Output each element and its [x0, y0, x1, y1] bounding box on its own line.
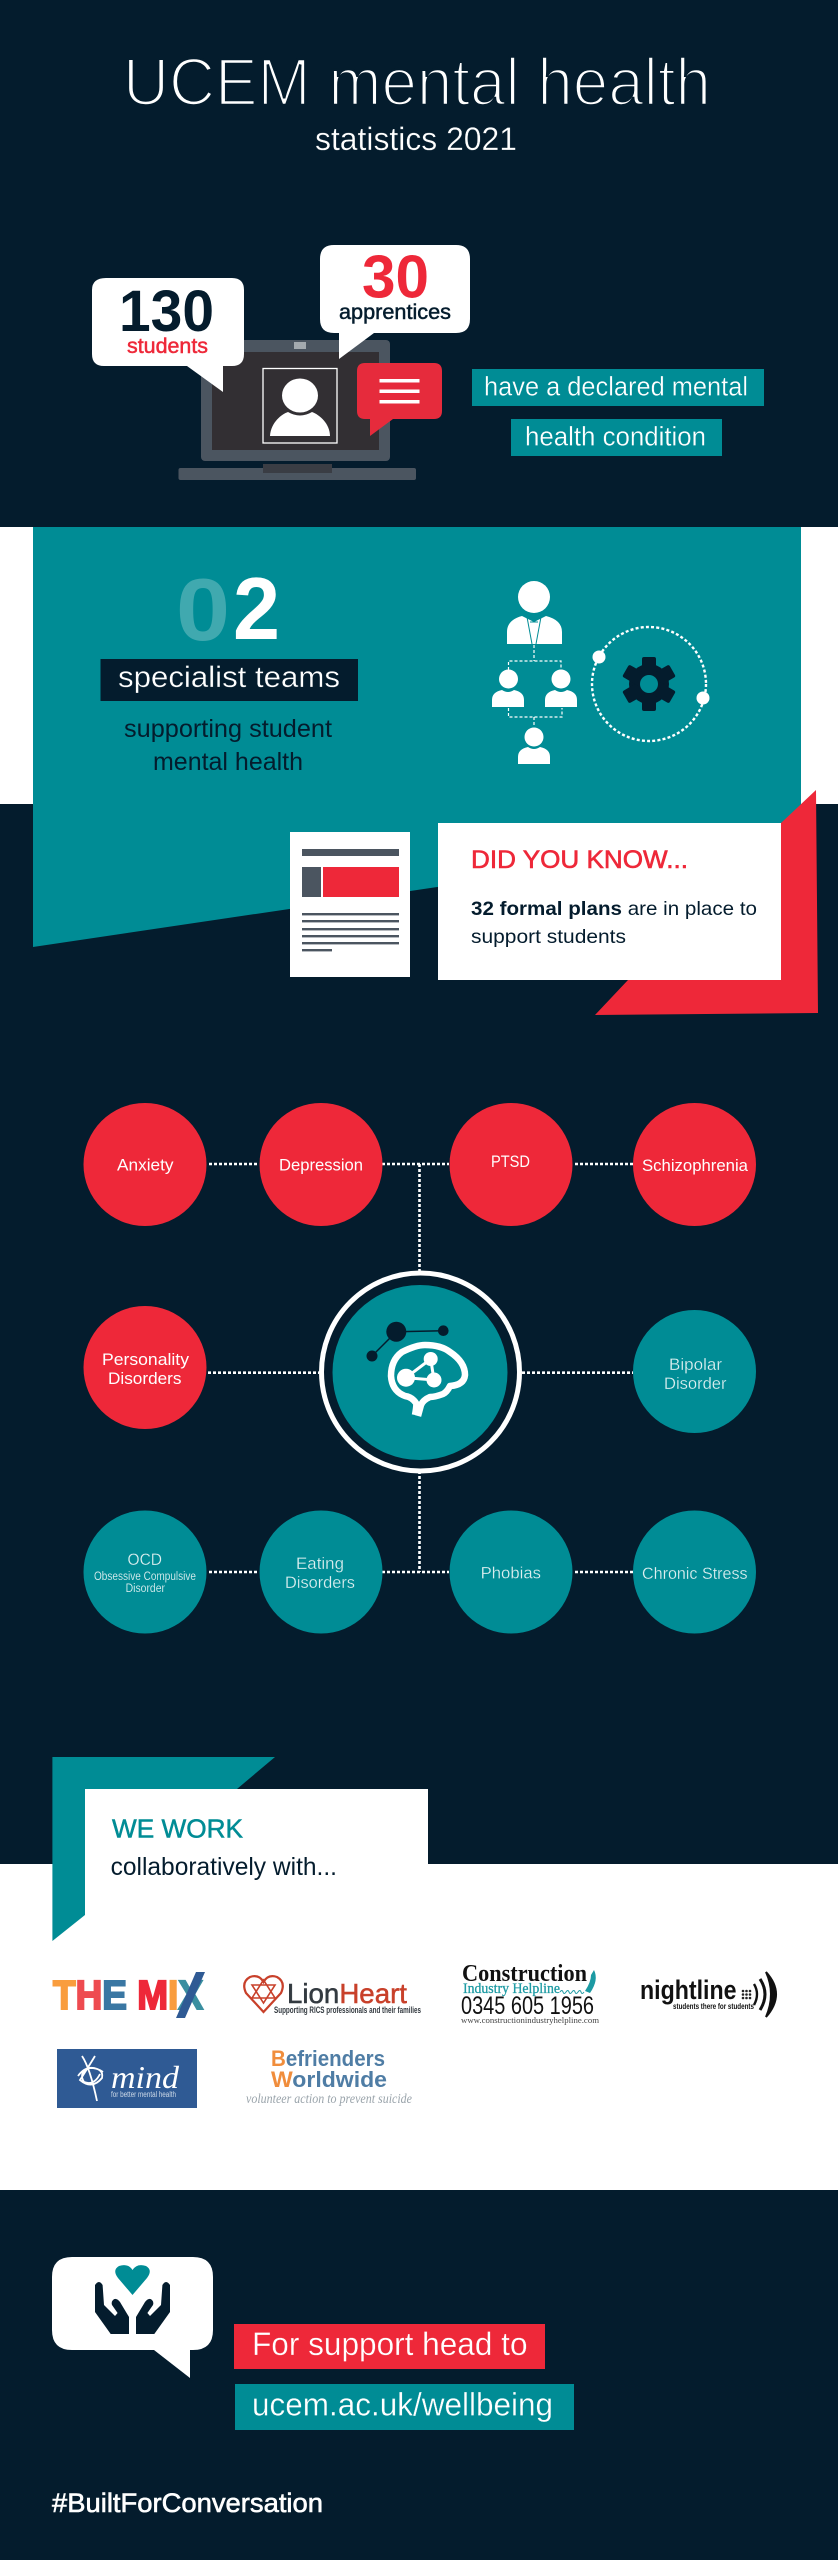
node: Bipolar Disorder: Disorder: [664, 1374, 727, 1393]
logo: Mind: mind: [111, 2059, 180, 2095]
node: Personality Disorders: Personality: [102, 1350, 190, 1369]
logo: The Mix: THE MIX: [53, 1972, 203, 2018]
card: did you know text: 32 formal plans are in place to: [471, 898, 757, 920]
card: did you know text: [438, 823, 781, 980]
label: specialist teams: specialist teams: [118, 661, 340, 694]
logo: Construction Industry Helpline: www.constructionindustryhelpline.com: [461, 2016, 600, 2025]
logo: nightline: students there for students: [673, 2001, 754, 2011]
node: Personality Disorders: Disorders: [108, 1369, 182, 1388]
logos: [53, 1961, 776, 2108]
logo: Construction Industry Helpline: Construction: [462, 1961, 587, 1987]
subtitle: statistics 2021: [315, 121, 517, 157]
card: did you know text: support students: [471, 926, 626, 948]
icon: central brain hub: [322, 1273, 520, 1471]
label: website: ucem.ac.uk/wellbeing: [252, 2387, 553, 2423]
stat: 02: 2: [233, 559, 280, 658]
label: for support head to: For support head to: [252, 2326, 528, 2362]
panel: specialist teams: [33, 527, 801, 947]
panel: support footer: [52, 2257, 574, 2518]
node: OCD: OCD: [128, 1550, 162, 1569]
panel: did you know: [290, 790, 818, 1015]
node: Eating Disorders: [260, 1510, 382, 1634]
logo: nightline: [640, 1972, 776, 2017]
icon: red chat bubble: [357, 363, 442, 436]
logo: Construction Industry Helpline: Industry Helpline: [463, 1981, 560, 1997]
node: Bipolar Disorder: [633, 1310, 756, 1433]
node: Eating Disorders: Eating: [296, 1554, 344, 1573]
icon: gear with dotted orbit: [592, 627, 710, 741]
node: Depression: [260, 1103, 382, 1226]
logo: Befrienders Worldwide: [246, 2046, 412, 2107]
node: OCD: Obsessive Compulsive: [94, 1571, 196, 1583]
logo: LionHeart: Supporting RICS professionals and their families: [274, 2005, 421, 2016]
chart: mental health conditions network: [84, 1103, 756, 1634]
red corner shape: [595, 790, 818, 1015]
callout: 130 students: 130: [119, 279, 214, 344]
card: heading: collaboratively with...: [111, 1853, 337, 1881]
logo: LionHeart: LionHeart: [287, 1978, 407, 2009]
callout: 130 students: students: [127, 335, 208, 358]
white band: partners: [0, 1864, 838, 2190]
panel: we work collaboratively: [52, 1757, 428, 1941]
label: health condition: health condition: [525, 422, 706, 452]
icon: speech bubble with hands and heart: [52, 2257, 213, 2378]
logo: Befrienders Worldwide: Worldwide: [271, 2067, 387, 2092]
icon: org chart: [492, 581, 577, 764]
logo: Construction Industry Helpline: [461, 1961, 600, 2025]
callout: 30 apprentices: apprentices: [339, 301, 451, 324]
node: Schizophrenia: [633, 1103, 756, 1226]
node: OCD: Disorder: [126, 1583, 165, 1595]
text: supporting student mental health: mental health: [153, 748, 303, 776]
logo: Construction Industry Helpline: 0345 605 1956: [461, 1992, 594, 2020]
logo: Befrienders Worldwide: Befrienders: [271, 2046, 385, 2071]
stat: 02: [176, 559, 280, 659]
icon: document: [290, 832, 410, 977]
hashtag: #BuiltForConversation: [52, 2488, 323, 2518]
card: heading: WE WORK: [112, 1814, 244, 1844]
node: OCD: [84, 1510, 206, 1634]
node: Phobias: Phobias: [481, 1564, 541, 1583]
white band behind teal panel: [0, 527, 838, 804]
node: Depression: Depression: [279, 1156, 363, 1174]
node: Anxiety: Anxiety: [117, 1156, 174, 1174]
node: Chronic Stress: [633, 1510, 756, 1634]
node: PTSD: [450, 1103, 572, 1226]
panel: declared conditions: [92, 244, 764, 480]
node: PTSD: PTSD: [491, 1152, 530, 1171]
logo: Mind: for better mental health: [111, 2090, 176, 2099]
node: Chronic Stress: Chronic Stress: [642, 1564, 748, 1583]
callout: 30 apprentices: 30: [362, 244, 429, 310]
node: Personality Disorders: [84, 1306, 206, 1429]
label: specialist teams: [100, 659, 358, 701]
node: Eating Disorders: Disorders: [285, 1573, 355, 1592]
logo: Mind: [57, 2049, 197, 2108]
text: supporting student mental health: supporting student: [124, 715, 332, 743]
node: Schizophrenia: Schizophrenia: [642, 1156, 749, 1175]
title: UCEM mental health: [123, 45, 711, 120]
text: supporting student mental health: [124, 715, 332, 776]
node: Phobias: [450, 1510, 572, 1634]
stat: 02: 0: [176, 560, 230, 659]
node: Anxiety: [84, 1103, 206, 1226]
connector lines: [208, 1164, 633, 1572]
card: did you know text: DID YOU KNOW...: [471, 846, 688, 874]
card: heading: [85, 1789, 428, 1915]
callout: 130 students: [92, 278, 244, 392]
teal panel background: [33, 527, 801, 947]
logo: LionHeart: [244, 1976, 421, 2016]
logo: Befrienders Worldwide: volunteer action to prevent suicide: [246, 2092, 412, 2107]
teal corner shape: [52, 1757, 275, 1941]
label: have a declared mental: have a declared mental: [484, 372, 748, 402]
logo: nightline: nightline: [640, 1975, 736, 2005]
icon: laptop: [178, 340, 416, 480]
callout: 30 apprentices: [320, 244, 470, 359]
node: Bipolar Disorder: Bipolar: [669, 1355, 722, 1374]
